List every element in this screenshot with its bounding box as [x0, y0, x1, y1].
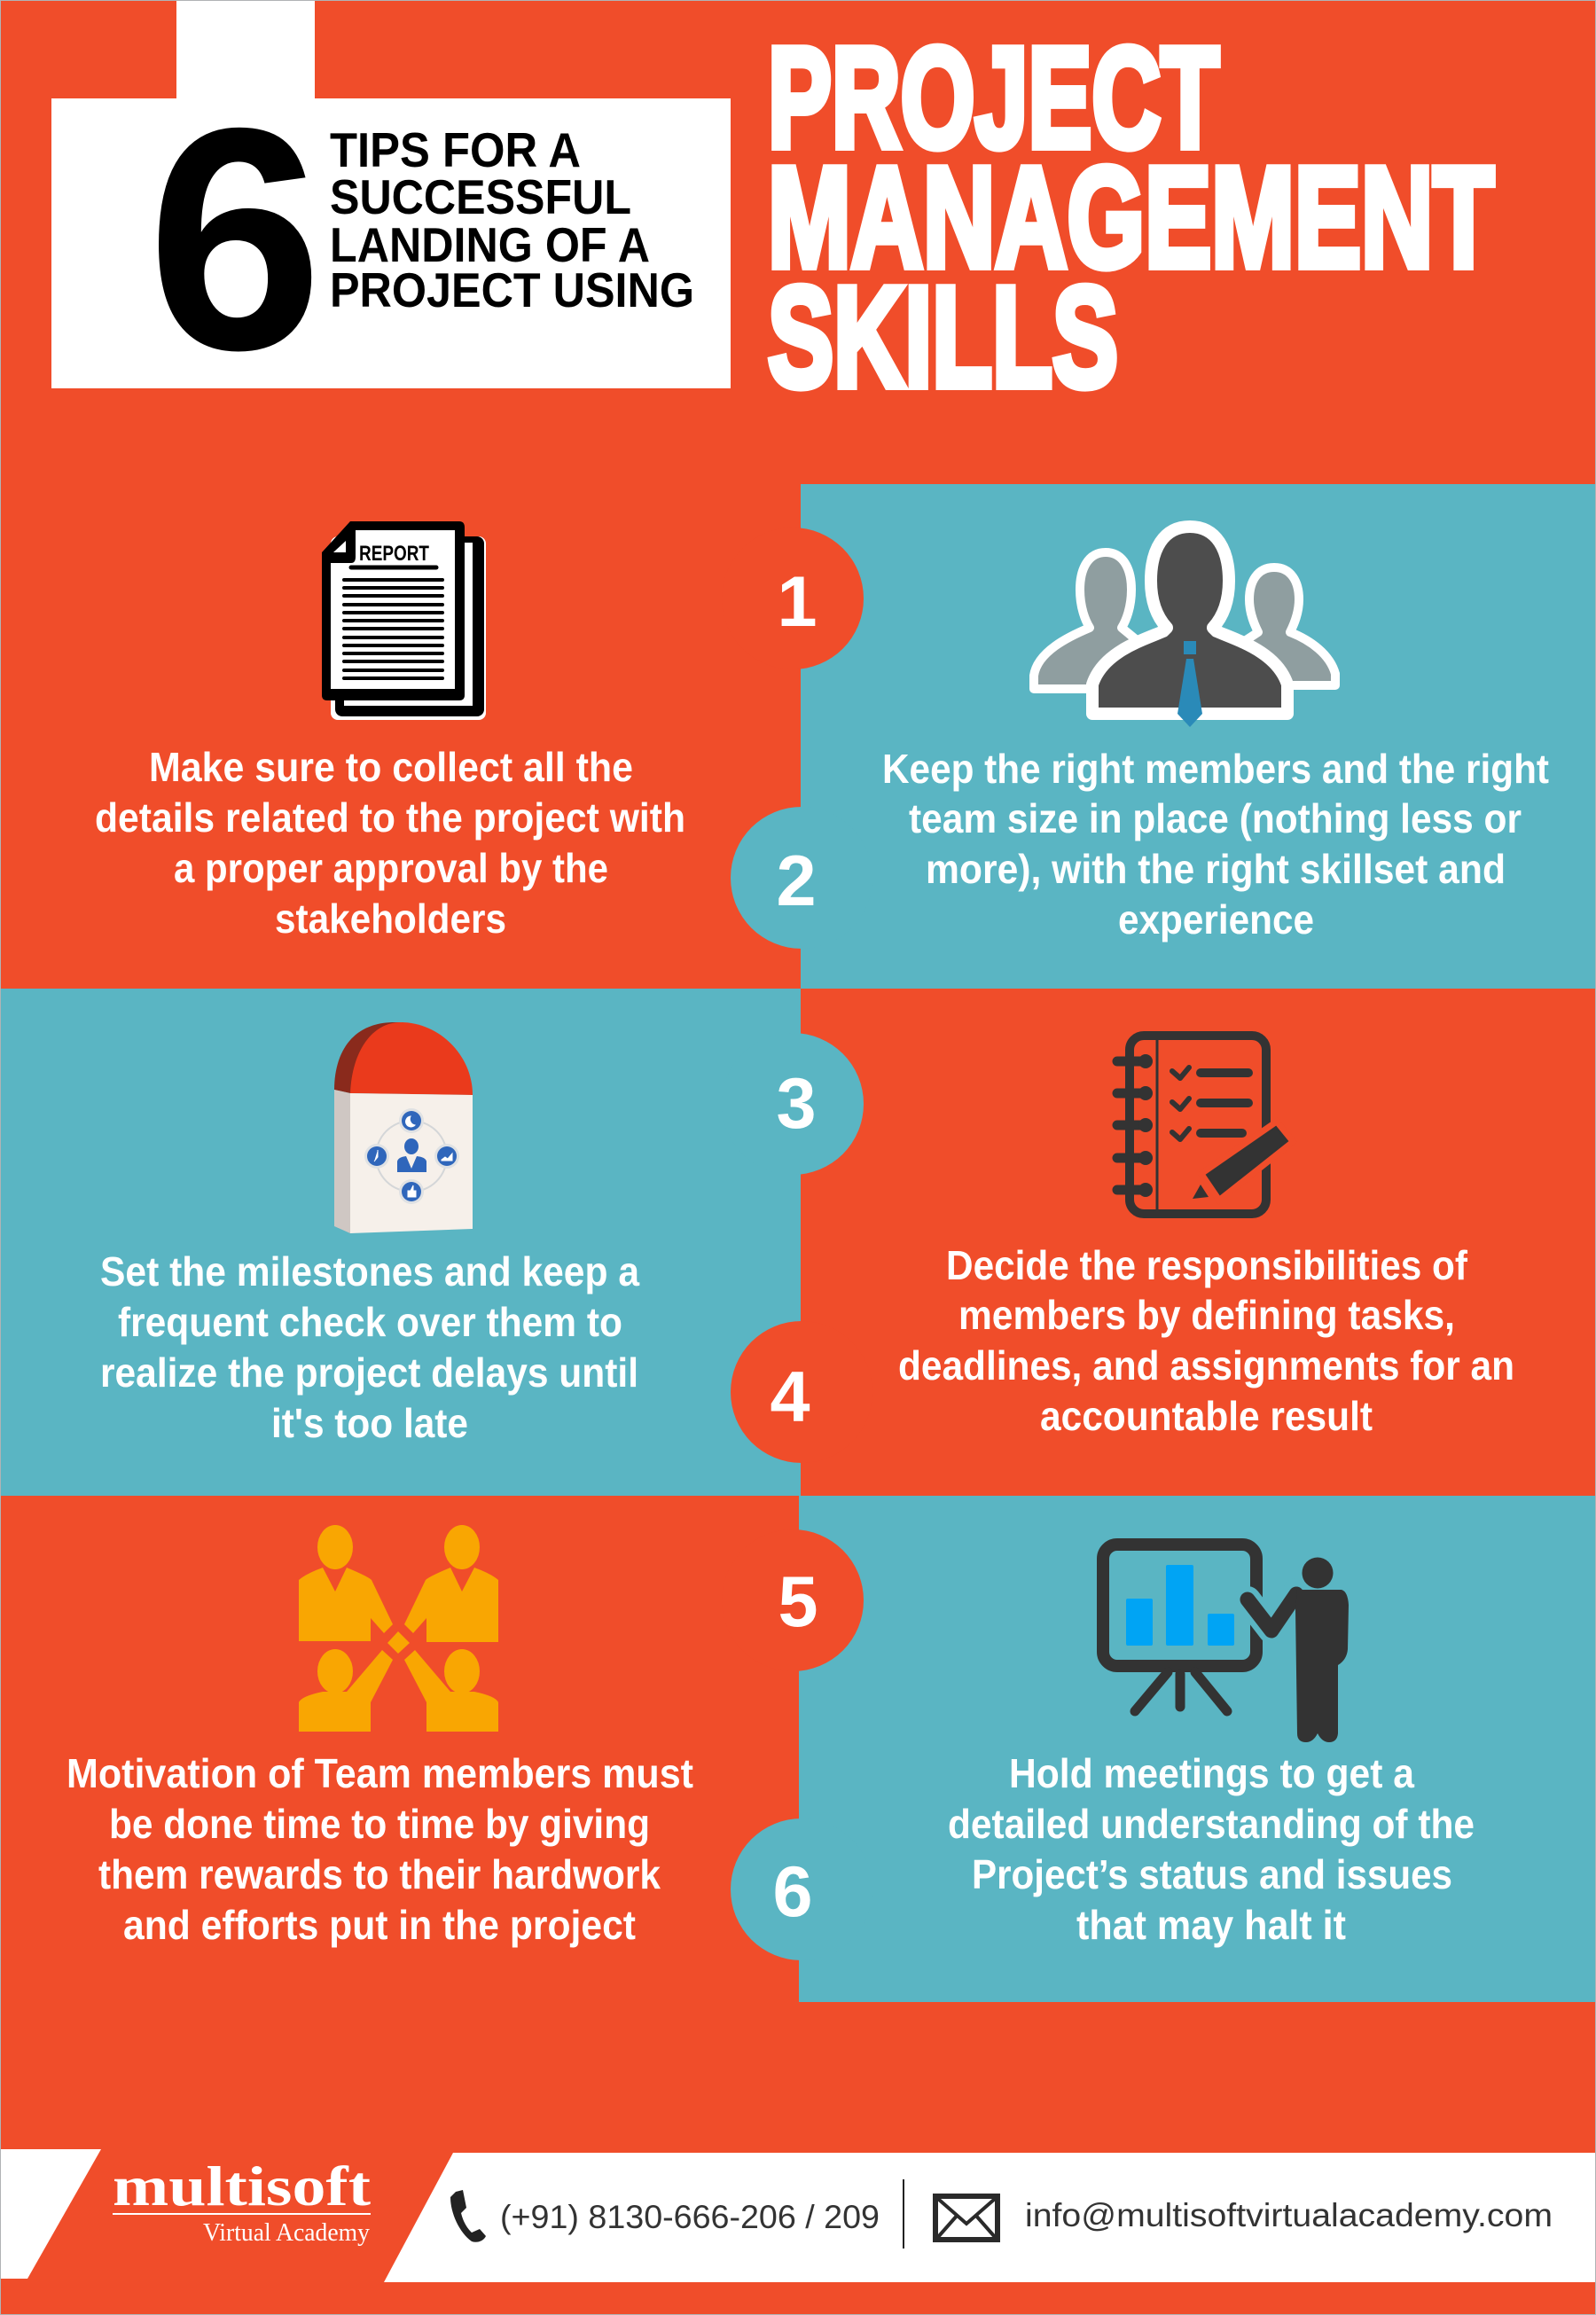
- subtitle text: SUCCESSFUL: [330, 169, 631, 224]
- email address: info@multisoftvirtualacademy.com: [1025, 2197, 1553, 2233]
- number badge 4: 4: [770, 1357, 810, 1437]
- title: SKILLS: [768, 257, 1118, 417]
- logo: multisoft: [113, 2155, 372, 2247]
- text: tip 2: [882, 746, 1549, 942]
- text: tip 3: it's too late: [271, 1400, 468, 1446]
- text: tip 3: realize the project delays until: [100, 1349, 638, 1396]
- text: tip 3: Set the milestones and keep a: [100, 1248, 639, 1294]
- panel: tip 3 milestones: [0, 989, 801, 1496]
- icon: team handshake: [299, 1525, 498, 1732]
- text: tip 2: more), with the right skillset and: [926, 846, 1506, 892]
- panel: tip 1 collect details: [0, 484, 801, 989]
- text: tip 5: and efforts put in the project: [123, 1902, 636, 1948]
- text: tip 5: be done time to time by giving: [109, 1801, 650, 1847]
- title: [768, 18, 1494, 417]
- text: tip 1: a proper approval by the: [174, 845, 608, 891]
- subtitle text: TIPS FOR A: [330, 122, 581, 177]
- number badge 5: [722, 1529, 864, 1671]
- text: tip 6: Project’s status and issues: [972, 1851, 1452, 1897]
- text: tip 2: Keep the right members and the right: [882, 746, 1549, 792]
- logo: multisoft: Virtual Academy: [203, 2219, 370, 2247]
- number badge 5: 5: [778, 1562, 818, 1642]
- icon: report document: REPORT: [359, 542, 429, 566]
- number badge 1: 1: [777, 562, 818, 642]
- panel: tip 6 meetings: [799, 1496, 1596, 2002]
- text: tip 1: [95, 744, 685, 942]
- footer bar: [0, 2149, 1596, 2282]
- number badge 3: 3: [776, 1064, 817, 1144]
- text: tip 6: [948, 1750, 1475, 1948]
- phone number: (+91) 8130-666-206 / 209: [500, 2199, 880, 2235]
- text: tip 4: accountable result: [1040, 1393, 1373, 1439]
- text: tip 1: Make sure to collect all the: [149, 744, 633, 790]
- icon: report document: [322, 521, 486, 720]
- text: tip 4: deadlines, and assignments for an: [898, 1342, 1514, 1388]
- icon: notebook checklist with pencil: [1117, 1036, 1287, 1214]
- icon: presenter with chart board: [1103, 1545, 1349, 1742]
- icon: team people: [1034, 527, 1335, 727]
- text: tip 6: detailed understanding of the: [948, 1801, 1475, 1847]
- number badge 3: [722, 1033, 864, 1175]
- text: tip 5: [66, 1750, 693, 1948]
- number badge 4: [731, 1321, 872, 1463]
- panel: tip 4 responsibilities: [801, 989, 1596, 1496]
- subtitle text: LANDING OF A: [330, 217, 650, 272]
- number badge 6: [731, 1818, 872, 1960]
- icon: phone: [450, 2190, 486, 2242]
- text: tip 1: details related to the project with: [95, 794, 685, 841]
- text: tip 4: [898, 1242, 1514, 1439]
- panel: tip 5 motivation: [0, 1496, 799, 2002]
- number badge 2: [731, 807, 872, 949]
- text: tip 1: stakeholders: [275, 895, 506, 942]
- text: tip 4: Decide the responsibilities of: [946, 1242, 1468, 1288]
- subtitle text: [330, 122, 694, 317]
- text: tip 3: [100, 1248, 639, 1446]
- number badge 2: 2: [776, 841, 817, 921]
- icon: envelope: [935, 2196, 998, 2240]
- logo: multisoft: multisoft: [113, 2155, 372, 2217]
- text: tip 2: experience: [1118, 896, 1314, 942]
- subtitle text: PROJECT USING: [330, 262, 694, 317]
- text: tip 4: members by defining tasks,: [958, 1292, 1455, 1338]
- header badge: 6 tips: [51, 0, 731, 416]
- text: tip 5: them rewards to their hardwork: [98, 1851, 661, 1897]
- text: tip 2: team size in place (nothing less or: [909, 795, 1522, 841]
- number badge 6: 6: [772, 1852, 813, 1932]
- text: tip 6: Hold meetings to get a: [1009, 1750, 1414, 1796]
- panel: tip 2 team members: [801, 484, 1596, 989]
- text: tip 6: that may halt it: [1076, 1902, 1346, 1948]
- text: tip 3: frequent check over them to: [118, 1299, 622, 1345]
- icon: milestone marker: [334, 1022, 473, 1233]
- big number 6: 6: [147, 62, 323, 416]
- number badge 1: [722, 528, 864, 669]
- title: PROJECT: [768, 18, 1219, 177]
- text: tip 5: Motivation of Team members must: [66, 1750, 693, 1796]
